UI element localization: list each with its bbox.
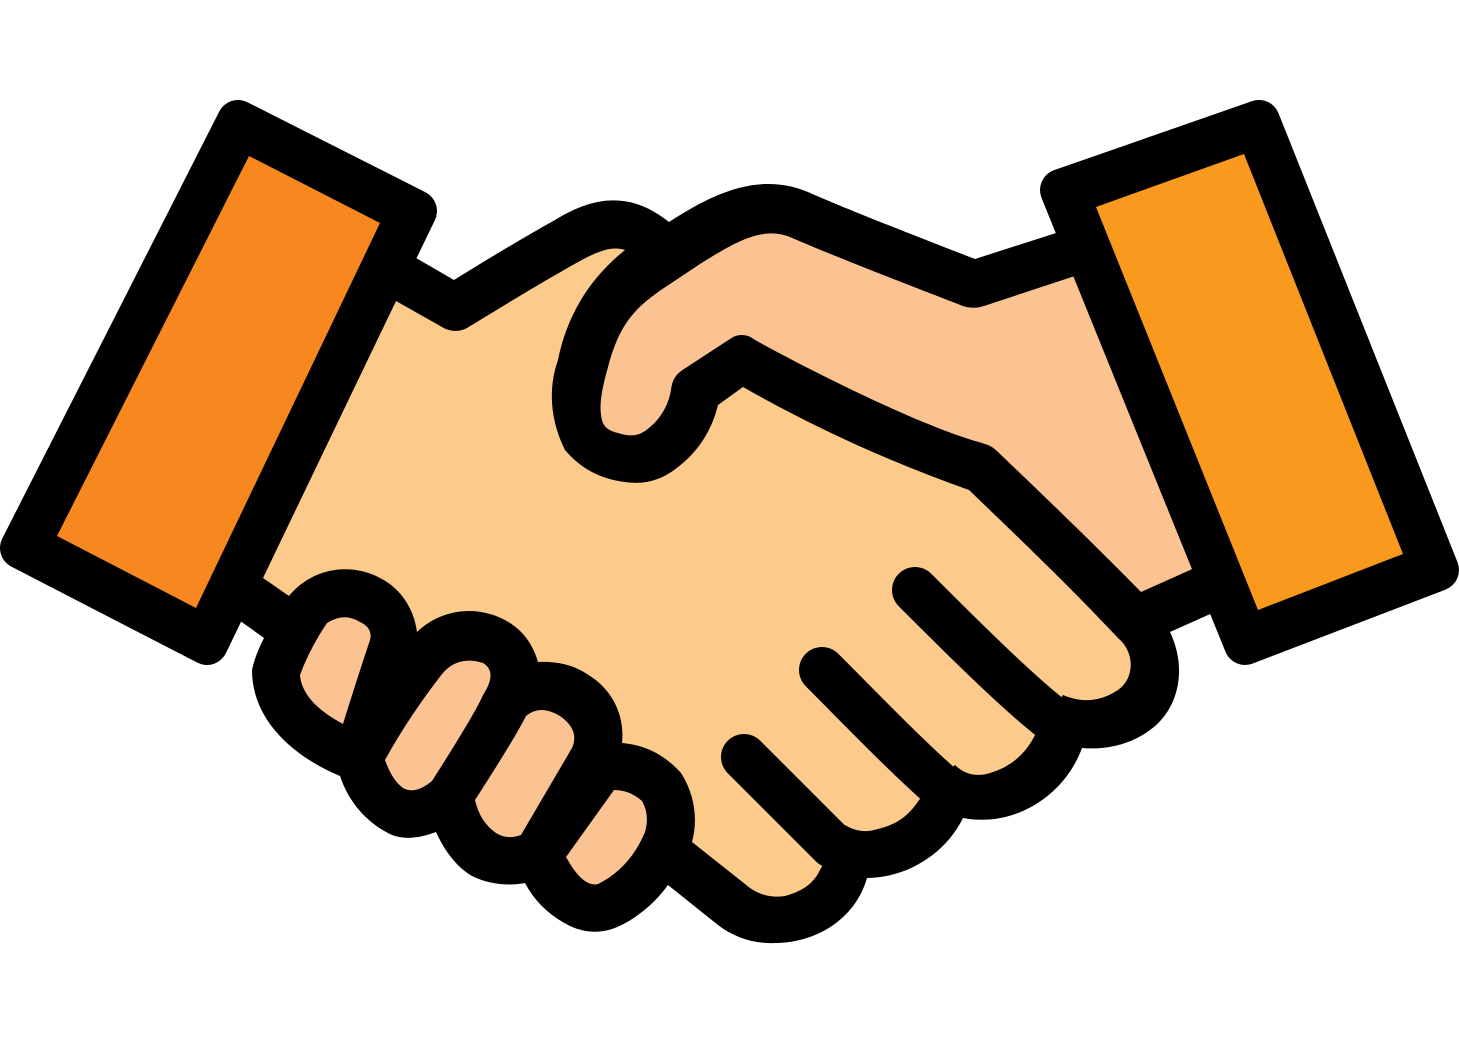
finger 4 [566,790,647,884]
finger 3 [475,710,574,837]
left cuff outline [21,121,416,644]
crease: lower finger [744,757,832,845]
left hand fill [263,248,1131,897]
right cuff outline [1061,121,1438,644]
crease: middle finger [822,670,945,790]
right hand fill [601,233,1208,592]
crease: upper finger [915,590,1056,722]
right cuff [1061,121,1438,644]
finger creases [744,590,1056,845]
hands black outline silhouette [225,184,1235,943]
finger 2 [385,661,490,790]
finger 1 [300,617,371,724]
left cuff fill [57,156,380,608]
left cuff [21,121,416,644]
left hand fingers [300,617,647,884]
right cuff fill [1096,154,1403,610]
